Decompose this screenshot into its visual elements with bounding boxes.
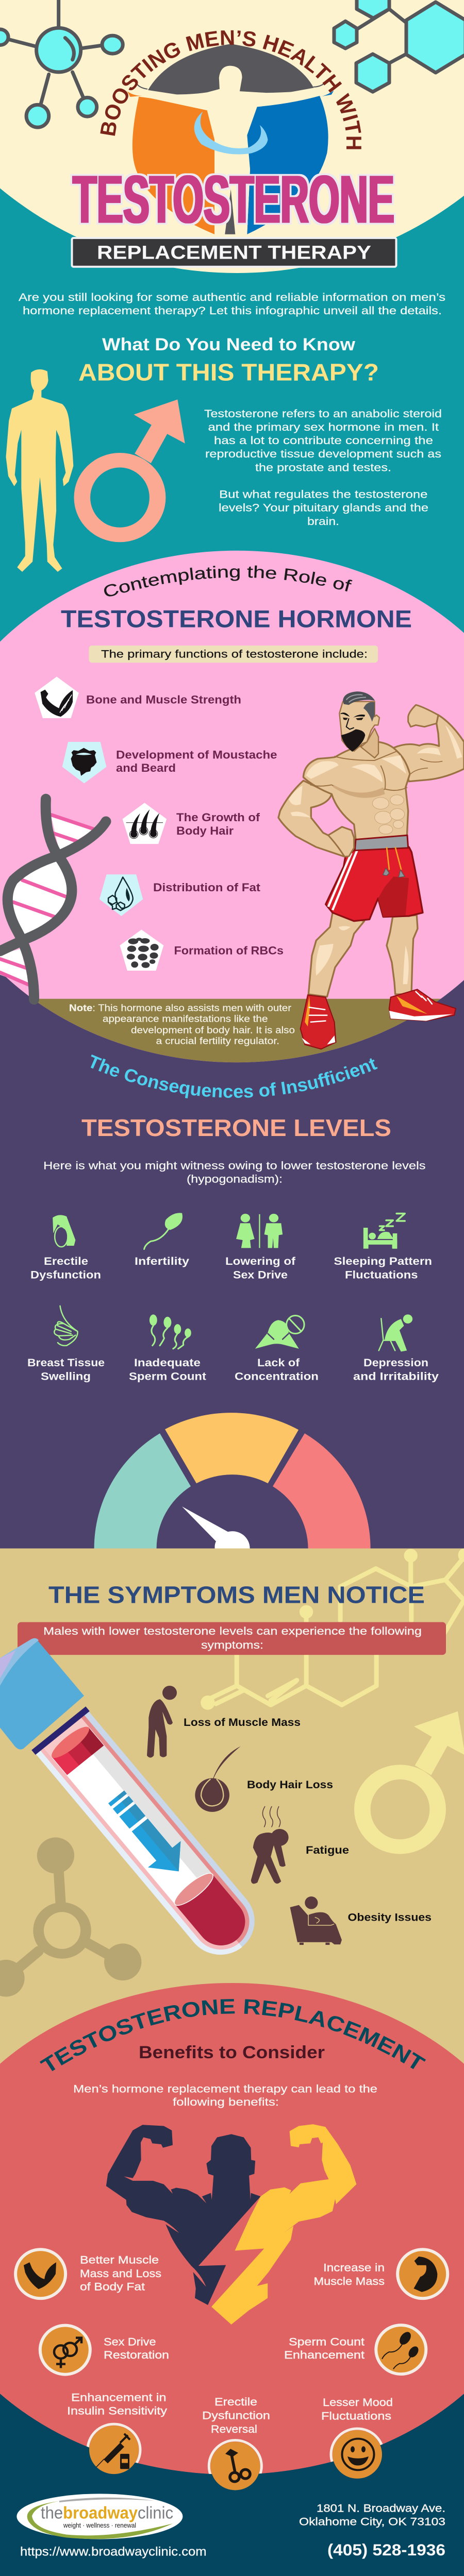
- icon: fat drop: [100, 874, 143, 916]
- callout: males with lower testosterone: Males with lower testosterone levels can experience the following: [43, 1625, 422, 1637]
- waistband: [355, 835, 408, 851]
- note text: development of body hair. It is also: [131, 1024, 295, 1035]
- intro text: hormone replacement therapy? Let this infographic unveil all the details.: [23, 304, 442, 317]
- text: benefits intro: Men’s hormone replacement therapy can lead to the: [73, 2083, 377, 2095]
- benefit: increase in muscle mass: [314, 2249, 448, 2298]
- title bar: replacement therapy: [72, 238, 396, 267]
- benefit: sperm count enhancement: [284, 2325, 426, 2374]
- icon: syringe and vial: [88, 2424, 140, 2476]
- symptom: loss of muscle mass: Loss of Muscle Mass: [184, 1716, 301, 1728]
- benefit: lesser mood fluctuations: Lesser Mood: [323, 2396, 393, 2409]
- benefit: increase in muscle mass: Muscle Mass: [314, 2275, 385, 2287]
- curved heading: testosterone replacement: TESTOSTERONE REPLACEMENT: [40, 1999, 426, 2071]
- symptom: body hair loss: Body Hair Loss: [247, 1778, 333, 1791]
- curved heading: contemplating the role of: Contemplating the Role of: [104, 566, 353, 597]
- text: what testosterone is: reproductive tissue development such as: [205, 448, 441, 460]
- illustration: blood test tube: [0, 1638, 269, 1969]
- background: purple: [0, 807, 464, 1548]
- arrow: [100, 1784, 195, 1885]
- icon: exhausted man: [251, 1807, 289, 1884]
- consequence: depression and irritability: [353, 1314, 439, 1382]
- callout: males with lower testosterone: symptoms:: [201, 1639, 263, 1651]
- symptom: loss of muscle mass: [147, 1686, 301, 1758]
- benefit: better muscle mass and loss of body fat: of Body Fat: [80, 2280, 145, 2293]
- icon: biceps in orange circle: [397, 2249, 448, 2298]
- consequence: inadequate sperm count: Sperm Count: [129, 1369, 206, 1382]
- consequence: infertility: [135, 1213, 189, 1267]
- function item: distribution of fat: [100, 874, 261, 916]
- consequence: infertility: Infertility: [135, 1255, 189, 1267]
- blood: [175, 1874, 255, 1955]
- fist: [408, 705, 438, 727]
- benefit: sperm count enhancement: Sperm Count: [289, 2335, 364, 2348]
- symptom: body hair loss: [195, 1746, 333, 1812]
- heading: testosterone levels: TESTOSTERONE LEVELS: [81, 1115, 391, 1141]
- consequence: sleeping pattern fluctuations: [334, 1213, 432, 1281]
- benefit: lesser mood fluctuations: Fluctuations: [321, 2410, 391, 2422]
- illustration: man in oval: [127, 44, 334, 234]
- consequence: breast tissue swelling: Breast Tissue: [27, 1356, 105, 1369]
- benefit: insulin sensitivity: [67, 2391, 167, 2476]
- symptom: fatigue: [251, 1807, 349, 1884]
- illustration: bodybuilder: [278, 691, 464, 1049]
- heading: benefits to consider: Benefits to Consider: [139, 2043, 325, 2062]
- icon: hair follicles: [122, 803, 167, 844]
- icon: hair follicle: [195, 1746, 241, 1812]
- consequence: depression and irritability: and Irritability: [353, 1369, 439, 1382]
- icon: sleeping in bed: [363, 1213, 405, 1249]
- chart: gauge: [94, 1413, 371, 1548]
- background: navy footer: [0, 2231, 464, 2576]
- consequence: erectile dysfunction: [30, 1215, 101, 1281]
- benefit: better muscle mass and loss of body fat: [15, 2249, 161, 2298]
- text: website: https://www.broadwayclinic.com: [20, 2545, 207, 2558]
- lowered arm: [278, 781, 354, 857]
- text: what testosterone is: brain.: [307, 515, 339, 528]
- raised arm: [393, 715, 464, 782]
- note text: a crucial fertility regulator.: [156, 1036, 279, 1046]
- background: teal: [0, 0, 464, 807]
- text: what you might witness: Here is what you might witness owing to lower testosterone levels: [43, 1159, 426, 1172]
- head: [339, 702, 379, 751]
- text: what you might witness: [43, 1159, 426, 1185]
- beard: [341, 730, 365, 752]
- icon: left molecule: [0, 0, 123, 127]
- text: what testosterone is: But what regulates the testosterone: [219, 488, 428, 500]
- consequence: lack of concentration: Concentration: [235, 1369, 319, 1382]
- icon: breast tissue: [54, 1306, 78, 1346]
- function item: distribution of fat: Distribution of Fat: [153, 881, 261, 894]
- icon: four sperm: [150, 1314, 191, 1349]
- note text: Note: This hormone also assists men with outer: [69, 1003, 291, 1013]
- panel: note band olive: [38, 998, 441, 1062]
- icon: woman and man: [236, 1214, 283, 1248]
- function item: moustache and beard: and Beard: [116, 761, 176, 774]
- illustration: muscular torso with lightning bolt: [106, 2124, 356, 2325]
- decoration: male symbol: [354, 1711, 464, 1854]
- red stopper: [52, 1727, 104, 1775]
- benefit: better muscle mass and loss of body fat: Mass and Loss: [80, 2267, 161, 2280]
- consequence: sleeping pattern fluctuations: Sleeping Pattern: [334, 1255, 432, 1267]
- gauge needle: [182, 1506, 250, 1548]
- icon: anatomy: [53, 1215, 75, 1247]
- icon: male symbol: [74, 399, 185, 542]
- neck: [361, 728, 378, 758]
- consequence: erectile dysfunction: Erectile: [44, 1255, 88, 1267]
- benefit: sex drive restoration: Restoration: [104, 2348, 169, 2361]
- consequence: lack of concentration: [235, 1316, 319, 1382]
- consequence: lowering of sex drive: Lowering of: [225, 1255, 296, 1267]
- symptom: fatigue: Fatigue: [306, 1843, 349, 1856]
- icon: smiley: [331, 2429, 384, 2480]
- icon: stooped man: [147, 1686, 177, 1758]
- function item: growth of body hair: [122, 803, 260, 844]
- function item: formation of RBCs: [120, 929, 284, 971]
- text: what testosterone is: the prostate and testes.: [255, 462, 391, 473]
- consequence: lack of concentration: Lack of: [257, 1356, 300, 1369]
- consequence: erectile dysfunction: Dysfunction: [30, 1268, 101, 1281]
- icon: two sperm: [376, 2325, 426, 2374]
- function item: growth of body hair: The Growth of: [176, 811, 260, 824]
- icon: arm in orange circle: [15, 2249, 65, 2298]
- panel: benefits red ellipse: [0, 1983, 464, 2475]
- function item: bone and muscle strength: Bone and Muscle Strength: [86, 693, 241, 706]
- function item: formation of RBCs: Formation of RBCs: [174, 944, 284, 957]
- icon: man silhouette: [6, 369, 73, 572]
- decoration: dark molecule: [0, 1837, 141, 1997]
- benefit: sex drive restoration: Sex Drive: [104, 2335, 156, 2348]
- benefit: sex drive restoration: [40, 2326, 169, 2375]
- benefit: erectile dysfunction reversal: Erectile: [214, 2395, 257, 2408]
- left leg: [308, 912, 364, 997]
- icon: head in hands with ban sign: [255, 1316, 304, 1349]
- panel: testosterone hormone pink ellipse: [0, 551, 464, 1062]
- sneakers: [301, 989, 456, 1049]
- consequence: inadequate sperm count: [129, 1314, 206, 1382]
- function item: moustache and beard: Development of Moustache: [116, 749, 277, 761]
- benefit: increase in muscle mass: Increase in: [323, 2261, 385, 2274]
- symptom: obesity issues: [290, 1896, 432, 1945]
- function item: moustache and beard: [62, 742, 277, 784]
- benefit: better muscle mass and loss of body fat: Better Muscle: [80, 2253, 159, 2266]
- intro text: Are you still looking for some authentic and reliable information on men’s: [19, 291, 445, 303]
- curved heading: the consequences of insufficient: The Consequences of Insufficient: [91, 1054, 377, 1098]
- navy ring: [31, 1706, 90, 1755]
- right leg: [387, 915, 418, 994]
- heading: the symptoms men notice: THE SYMPTOMS MEN NOTICE: [48, 1582, 425, 1608]
- text: benefits intro: following benefits:: [173, 2096, 279, 2108]
- logo: the broadway clinic: weight · wellness · renewal: [63, 2521, 136, 2529]
- logo: the broadway clinic: [16, 2494, 183, 2539]
- consequence: breast tissue swelling: [27, 1306, 105, 1382]
- text: what testosterone is: Testosterone refers to an anabolic steroid: [204, 408, 442, 420]
- icon: red blood cells: [120, 929, 163, 971]
- text: what you might witness: (hypogonadism):: [187, 1173, 283, 1185]
- curved title: boosting men's health with: BOOSTING MEN’S HEALTH WITH: [100, 30, 361, 149]
- consequence: lowering of sex drive: [225, 1214, 296, 1281]
- icon: sperm: [144, 1213, 183, 1249]
- torso: [303, 742, 410, 841]
- symptom: obesity issues: Obesity Issues: [348, 1911, 432, 1923]
- icon: organ symbol: [209, 2440, 261, 2492]
- consequence: sleeping pattern fluctuations: Fluctuations: [345, 1268, 418, 1281]
- icon: depressed person on chair: [379, 1314, 412, 1352]
- icon: obese man in armchair: [290, 1896, 342, 1945]
- benefit: erectile dysfunction reversal: Reversal: [211, 2422, 257, 2435]
- callout: males with lower testosterone: [18, 1622, 446, 1655]
- text: phone: (405) 528-1936: [327, 2540, 445, 2559]
- icon: right hexagon molecule: [334, 0, 464, 92]
- benefit: erectile dysfunction reversal: Dysfunction: [202, 2409, 270, 2421]
- text: address: [299, 2502, 445, 2528]
- callout: primary functions: [89, 646, 378, 663]
- consequence: depression and irritability: Depression: [363, 1356, 428, 1369]
- heading: what do you need to know: What Do You Need to Know: [102, 335, 355, 354]
- intro text: [19, 291, 445, 317]
- face: [341, 713, 365, 718]
- text: what testosterone is: and the primary sex hormone in men. It: [208, 421, 439, 433]
- icon: beard: [62, 742, 106, 784]
- note text: [69, 1003, 295, 1046]
- cap: [0, 1639, 84, 1750]
- shorts: [326, 847, 423, 921]
- benefit: insulin sensitivity: Enhancement in: [71, 2391, 167, 2404]
- decoration: hormone molecule structure: [201, 1548, 464, 1710]
- text: what testosterone is: has a lot to contribute concerning the: [214, 434, 433, 447]
- icon: flexed arm: [35, 676, 79, 718]
- icon: DNA helix: [0, 799, 106, 999]
- icon: gender symbols: [40, 2326, 90, 2375]
- text: benefits intro: [73, 2083, 377, 2108]
- logo: the broadway clinic: thebroadwayclinic: [41, 2504, 173, 2522]
- text: address: Oklahome City, OK 73103: [299, 2515, 445, 2528]
- title bar: replacement therapy: REPLACEMENT THERAPY: [97, 242, 371, 263]
- text: what testosterone is: levels? Your pituitary glands and the: [219, 502, 428, 514]
- text: address: 1801 N. Broadway Ave.: [317, 2502, 445, 2515]
- benefit: lesser mood fluctuations: [321, 2396, 393, 2480]
- consequence: lowering of sex drive: Sex Drive: [233, 1268, 288, 1281]
- benefit: sperm count enhancement: Enhancement: [284, 2348, 364, 2361]
- header panel: cream circle: [0, 0, 464, 273]
- text: what testosterone is: [204, 408, 442, 528]
- consequence: breast tissue swelling: Swelling: [41, 1369, 91, 1382]
- function item: bone and muscle strength: [35, 676, 241, 718]
- benefit: erectile dysfunction reversal: [202, 2395, 270, 2492]
- benefit: insulin sensitivity: Insulin Sensitivity: [67, 2404, 167, 2417]
- panel: symptoms background: [0, 1548, 464, 2255]
- note text: appearance manifestations like the: [103, 1013, 268, 1024]
- heading: testosterone hormone: TESTOSTERONE HORMONE: [61, 606, 412, 633]
- function item: growth of body hair: Body Hair: [176, 824, 234, 837]
- callout: primary functions: The primary functions of testosterone include:: [101, 648, 368, 660]
- consequence: inadequate sperm count: Inadequate: [134, 1356, 201, 1369]
- hand on hip: [328, 827, 354, 857]
- heading: about this therapy: ABOUT THIS THERAPY?: [78, 359, 379, 386]
